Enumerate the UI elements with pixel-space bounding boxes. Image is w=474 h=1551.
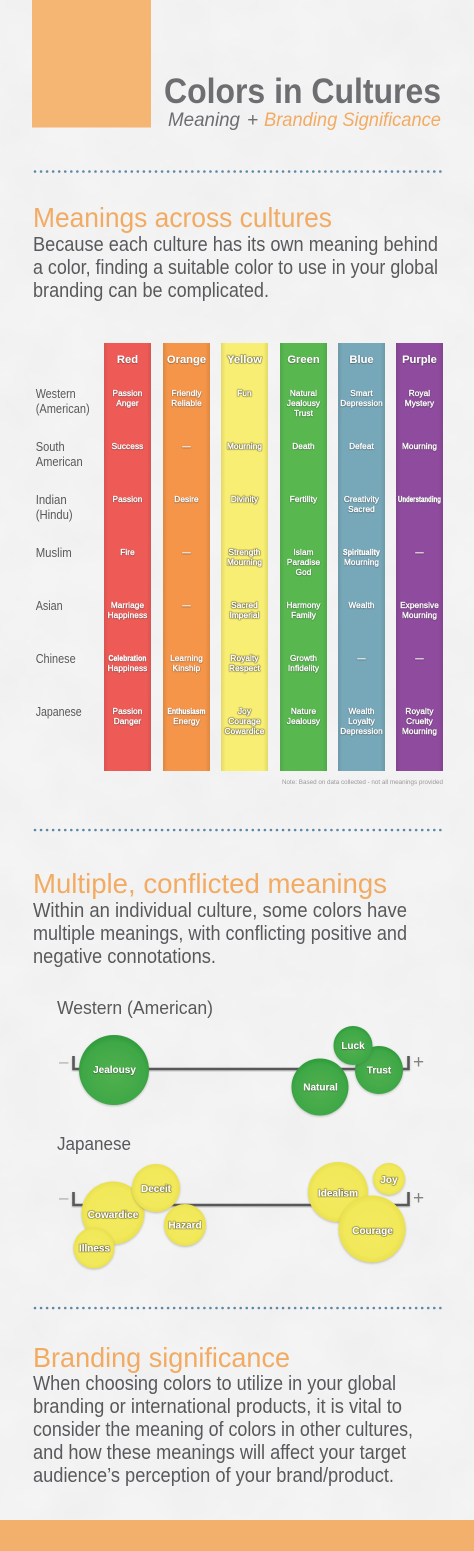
bubble: cowardice: Cowardice xyxy=(88,1210,139,1221)
footer color band xyxy=(0,1520,474,1551)
column: orange: — xyxy=(182,601,191,610)
table note: Note: Based on data collected - not all meanings provided xyxy=(282,779,443,786)
branding text: audience’s perception of your brand/product. xyxy=(33,1465,394,1487)
column: yellow: Divinity xyxy=(231,495,259,504)
column: green: Nature xyxy=(291,707,316,716)
column: purple: Purple xyxy=(402,354,437,366)
subtitle: Meaning xyxy=(168,110,240,131)
minus sign: – xyxy=(59,1188,69,1207)
bubble: jealousy xyxy=(79,1035,149,1105)
column: blue xyxy=(338,343,385,771)
column: orange: — xyxy=(182,548,191,557)
column: green: Islam xyxy=(293,548,314,557)
column: purple: Mystery xyxy=(405,399,435,408)
culture row labels: American xyxy=(36,454,83,469)
bubble: natural xyxy=(292,1058,348,1116)
column: green: Family xyxy=(291,611,317,620)
column: green: Paradise xyxy=(287,558,320,567)
column: orange: Kinship xyxy=(173,664,201,673)
column: green: Jealousy xyxy=(287,717,321,726)
column: yellow: Courage xyxy=(228,717,261,726)
column: red: Red xyxy=(117,354,138,366)
subtitle xyxy=(168,110,441,131)
bubble: luck: Luck xyxy=(341,1041,365,1052)
column: green: Green xyxy=(287,354,320,366)
column: purple: Royalty xyxy=(405,707,434,716)
column: yellow: Yellow xyxy=(227,354,262,366)
bubble: cowardice xyxy=(82,1182,144,1244)
column: yellow: Mourning xyxy=(227,558,262,567)
column: green: Growth xyxy=(290,654,317,663)
column: orange: — xyxy=(182,442,191,451)
chart: meanings table xyxy=(36,343,443,786)
column: purple: Expensive xyxy=(400,601,439,610)
title: Colors in Cultures xyxy=(164,72,441,111)
bubble: trust xyxy=(355,1046,403,1094)
column: red xyxy=(104,343,151,771)
column: blue: Spirituality xyxy=(343,548,380,557)
subtitle: Branding Significance xyxy=(264,110,441,131)
column: green: Harmony xyxy=(286,601,321,610)
column: green: Death xyxy=(292,442,315,451)
bubble: jealousy: Jealousy xyxy=(93,1065,136,1076)
culture row labels: Western xyxy=(36,386,76,401)
column: orange: Reliable xyxy=(171,399,202,408)
branding text: and how these meanings will affect your target xyxy=(33,1442,406,1464)
column: blue: Mourning xyxy=(344,558,379,567)
column: orange: Friendly xyxy=(171,389,202,398)
column: orange: Energy xyxy=(173,717,201,726)
column: red: Success xyxy=(112,442,143,451)
column: purple: Mourning xyxy=(402,611,437,620)
header color block xyxy=(32,0,151,128)
conflicted meanings text: multiple meanings, with conflicting positive and xyxy=(33,923,407,945)
culture row labels xyxy=(36,386,90,719)
column: green: Jealousy xyxy=(287,399,321,408)
bubble: courage: Courage xyxy=(352,1226,393,1237)
heading: multiple conflicted meanings: Multiple, conflicted meanings xyxy=(33,868,387,899)
bubble: hazard: Hazard xyxy=(168,1220,202,1232)
scale axis xyxy=(74,1192,408,1205)
culture row labels: Muslim xyxy=(36,545,72,560)
column: purple: Royal xyxy=(409,389,430,398)
conflicted meanings text xyxy=(33,900,407,968)
column: orange: Orange xyxy=(167,354,206,366)
label: western: Western (American) xyxy=(57,998,213,1018)
bubble: deceit xyxy=(132,1164,180,1212)
branding text xyxy=(33,1373,413,1487)
column: blue: Depression xyxy=(340,399,383,408)
column: purple: Understanding xyxy=(398,495,441,504)
culture row labels: Chinese xyxy=(36,651,76,666)
bubble: idealism xyxy=(308,1162,368,1222)
column: yellow: Sacred xyxy=(231,601,258,610)
bubble: hazard xyxy=(164,1204,206,1246)
column: yellow: Joy xyxy=(238,707,252,716)
conflicted meanings text: Within an individual culture, some colors have xyxy=(33,900,407,922)
column: yellow: Mourning xyxy=(227,442,262,451)
culture row labels: Asian xyxy=(36,598,63,613)
bubble: courage xyxy=(338,1196,406,1262)
branding text: branding or international products, it is vital to xyxy=(33,1396,402,1418)
heading: branding significance: Branding significance xyxy=(33,1342,290,1373)
column: blue: Blue xyxy=(349,354,374,366)
column: blue: Depression xyxy=(340,727,383,736)
chart: japanese scale xyxy=(57,1134,424,1268)
column: purple: — xyxy=(415,654,424,663)
branding text: When choosing colors to utilize in your global xyxy=(33,1373,396,1395)
column: red: Passion xyxy=(113,495,143,504)
bubble: natural: Natural xyxy=(303,1082,338,1094)
column: red: Fire xyxy=(120,548,135,557)
culture row labels: Japanese xyxy=(36,704,82,719)
bubble: joy: Joy xyxy=(380,1175,398,1186)
column: orange xyxy=(163,343,210,771)
column: orange: Learning xyxy=(170,654,203,663)
column: orange: Enthusiasm xyxy=(168,707,206,716)
column: blue: Smart xyxy=(350,389,373,398)
bubble: trust: Trust xyxy=(367,1066,392,1076)
bubble: deceit: Deceit xyxy=(141,1184,172,1195)
section: branding significance xyxy=(33,1342,413,1487)
column: blue: Wealth xyxy=(348,707,375,716)
column: green xyxy=(280,343,327,771)
column: purple: Mourning xyxy=(402,727,437,736)
column: yellow: Respect xyxy=(229,664,261,673)
column: green: Infidelity xyxy=(288,664,320,673)
intro text: branding can be complicated. xyxy=(33,280,269,302)
column: red: Celebration xyxy=(108,654,146,663)
column: yellow: Strength xyxy=(229,548,261,557)
plus sign: + xyxy=(413,1052,424,1073)
scale axis xyxy=(74,1056,408,1069)
culture row labels: (American) xyxy=(36,401,90,416)
intro text: a color, finding a suitable color to use in your global xyxy=(33,257,438,279)
culture row labels: South xyxy=(36,439,65,454)
column: green: Trust xyxy=(294,409,314,418)
plus sign: + xyxy=(413,1188,424,1209)
column: yellow: Royalty xyxy=(230,654,259,663)
column: orange: Desire xyxy=(174,495,199,504)
minus sign: – xyxy=(59,1052,69,1071)
column: purple: Mourning xyxy=(402,442,437,451)
column: red: Anger xyxy=(116,399,139,408)
intro text xyxy=(33,234,438,302)
column: green: Fertility xyxy=(290,495,318,504)
bubble: illness xyxy=(74,1228,114,1268)
column: yellow: Fun xyxy=(237,389,252,398)
column: red: Happiness xyxy=(108,611,147,620)
column: blue: Sacred xyxy=(348,505,375,514)
branding text: consider the meaning of colors in other cultures, xyxy=(33,1419,413,1441)
column: blue: Wealth xyxy=(348,601,375,610)
column: yellow: Cowardice xyxy=(225,727,265,736)
column: blue: — xyxy=(357,654,366,663)
bubble: luck xyxy=(334,1026,372,1065)
column: purple: Cruelty xyxy=(406,717,434,726)
bubble: idealism: Idealism xyxy=(318,1188,358,1200)
intro text: Because each culture has its own meaning behind xyxy=(33,234,438,256)
bubble: illness: Illness xyxy=(79,1244,110,1254)
column: purple xyxy=(396,343,443,771)
section: meanings across cultures xyxy=(33,202,438,302)
column: blue: Loyalty xyxy=(348,717,376,726)
column: green: God xyxy=(296,568,312,577)
conflicted meanings text: negative connotations. xyxy=(33,946,216,968)
column: blue: Creativity xyxy=(344,495,380,504)
column: red: Passion xyxy=(113,707,143,716)
column: yellow: Imperial xyxy=(229,611,260,620)
column: red: Danger xyxy=(114,717,141,726)
chart: western american scale xyxy=(57,998,424,1116)
column: yellow xyxy=(221,343,268,771)
culture row labels: (Hindu) xyxy=(36,507,73,522)
column: red: Happiness xyxy=(108,664,147,673)
culture row labels: Indian xyxy=(36,492,67,507)
column: green: Natural xyxy=(290,389,317,398)
subtitle: + xyxy=(247,110,258,131)
column: red: Marriage xyxy=(111,601,144,610)
bubble: joy xyxy=(373,1163,405,1195)
heading: meanings across cultures: Meanings across cultures xyxy=(33,202,332,233)
label: japanese: Japanese xyxy=(57,1134,131,1154)
column: blue: Defeat xyxy=(349,442,375,451)
column: red: Passion xyxy=(113,389,143,398)
column: purple: — xyxy=(415,548,424,557)
section: multiple conflicted meanings xyxy=(33,868,407,968)
